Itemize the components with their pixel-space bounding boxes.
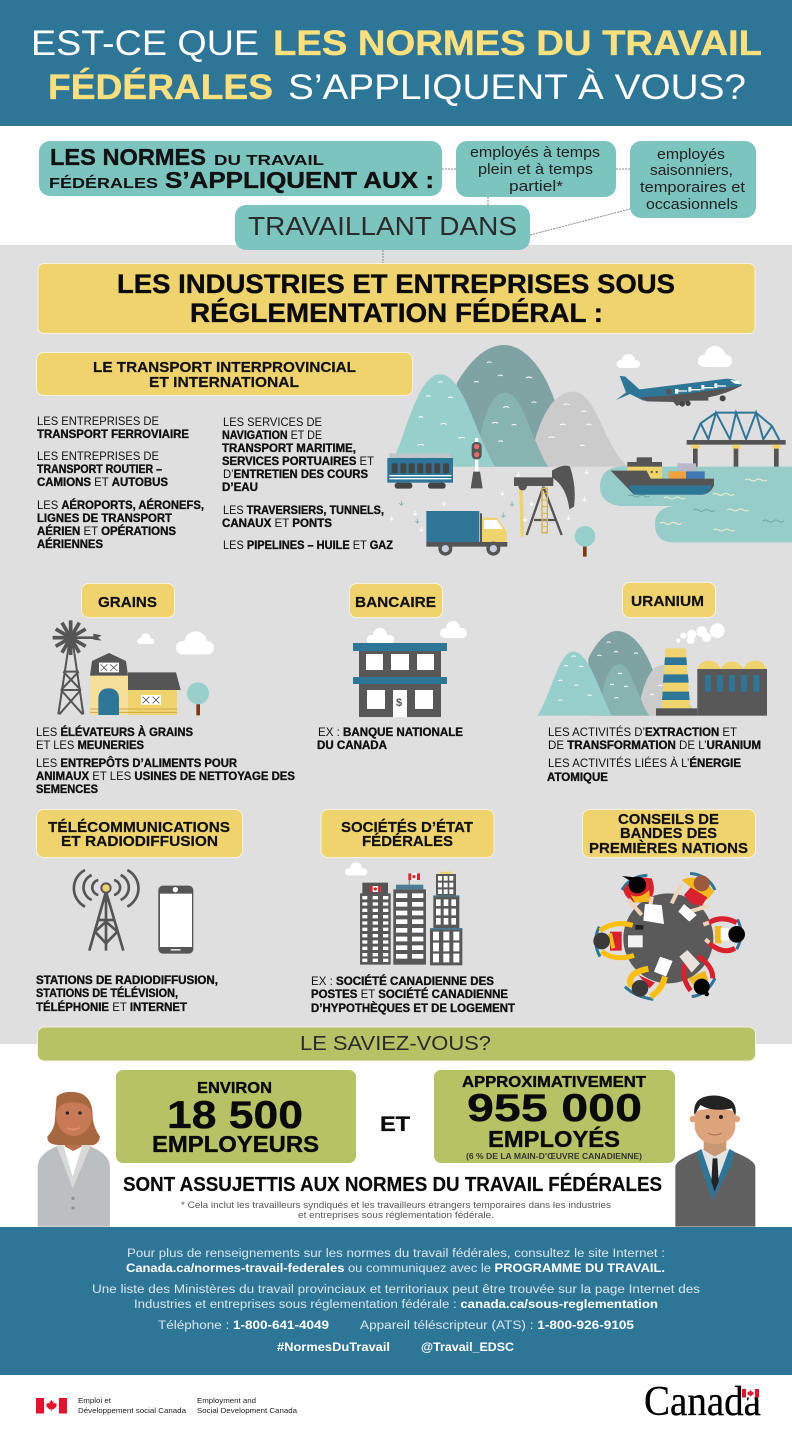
heading: bancaire: BANCAIRE xyxy=(355,594,436,611)
label: et: ET xyxy=(380,1113,410,1136)
box: employés à temps plein: partiel* xyxy=(509,179,563,195)
illustration: bank building: $ xyxy=(396,697,402,709)
person bottom left xyxy=(638,975,655,988)
heading: conseils de bandes: BANDES DES xyxy=(620,825,717,842)
footer contact panel: Industries et entreprises sous réglementation fédérale : canada.ca/sous-reglementation xyxy=(134,1299,658,1311)
grains text: ET LES MEUNERIES xyxy=(36,740,144,752)
illustration: transport landscape xyxy=(387,345,792,557)
footnote: et entreprises sous réglementation fédérale. xyxy=(298,1210,494,1221)
stat: employeurs xyxy=(116,1070,356,1163)
stat: employeurs: 18 500 xyxy=(167,1094,303,1137)
statement: SONT ASSUJETTIS AUX NORMES DU TRAVAIL FÉDÉRALES xyxy=(123,1173,662,1196)
heading: conseils de bandes: CONSEILS DE xyxy=(618,811,719,828)
tree xyxy=(583,546,587,557)
heading: télécommunications xyxy=(36,810,242,858)
transport text column 2: LES TRAVERSIERS, TUNNELS, xyxy=(223,505,384,517)
transport text column 1: CAMIONS ET AUTOBUS xyxy=(37,477,168,489)
heading: les industries: LES INDUSTRIES ET ENTREPRISES SOUS xyxy=(117,269,675,299)
box: les normes s'appliquent aux: DU TRAVAIL xyxy=(214,152,324,169)
clouds xyxy=(617,346,732,368)
box: employés saisonniers: occasionnels xyxy=(646,197,738,213)
footnote: * Cela inclut les travailleurs syndiqués et les travailleurs étrangers temporaires dans les industries xyxy=(181,1200,611,1211)
transport text column 2 xyxy=(222,417,393,552)
box: employés saisonniers: temporaires et xyxy=(640,180,745,196)
uranium text: LES ACTIVITÉS D’EXTRACTION ET xyxy=(548,726,737,739)
uranium text: ATOMIQUE xyxy=(547,772,608,784)
transport text column 2: TRANSPORT MARITIME, xyxy=(222,443,356,455)
box: employés saisonniers xyxy=(630,141,756,218)
stat: employés: APPROXIMATIVEMENT xyxy=(462,1074,647,1091)
heading: télécommunications: TÉLÉCOMMUNICATIONS xyxy=(48,819,230,836)
uranium text: DE TRANSFORMATION DE L’URANIUM xyxy=(548,740,761,752)
illustration: farm with windmill xyxy=(53,620,214,715)
small arrows xyxy=(390,469,589,531)
heading: sociétés d'état xyxy=(321,810,494,858)
telecom text xyxy=(36,975,218,1014)
grains text: ANIMAUX ET LES USINES DE NETTOYAGE DES xyxy=(36,771,295,783)
person bottom right xyxy=(688,971,708,988)
illustration: woman xyxy=(38,1092,110,1227)
transport text column 1: AÉRIENNES xyxy=(37,538,103,551)
stat: employés: EMPLOYÉS xyxy=(488,1125,620,1152)
ship xyxy=(677,463,696,471)
transport text column 2: D’ENTRETIEN DES COURS xyxy=(223,469,368,481)
illustration: antenna and phone xyxy=(74,870,193,954)
box: travaillant dans: TRAVAILLANT DANS xyxy=(248,211,517,241)
transport text column 1: TRANSPORT ROUTIER – xyxy=(37,464,163,476)
truck xyxy=(426,511,479,542)
signature: Canadian flag and department name: Développement social Canada xyxy=(78,1406,187,1415)
footnote xyxy=(181,1200,611,1221)
footer contact panel: Pour plus de renseignements sur les normes du travail fédérales, consultez le site Internet : xyxy=(127,1248,665,1260)
footer contact panel: Appareil téléscripteur (ATS) : 1-800-926-9105 xyxy=(360,1320,635,1332)
heading: uranium: URANIUM xyxy=(631,593,704,610)
heading: sociétés d'état: FÉDÉRALES xyxy=(362,833,453,850)
header banner: LES NORMES DU TRAVAIL xyxy=(273,24,762,63)
signature: Canadian flag and department name xyxy=(36,1396,298,1415)
footer contact panel: Une liste des Ministères du travail provinciaux et territoriaux peut être trouvée sur la page Internet des xyxy=(92,1284,700,1296)
person top left xyxy=(623,877,654,903)
box: les normes s'appliquent aux xyxy=(39,141,442,196)
telecom text: TÉLÉPHONIE ET INTERNET xyxy=(36,1001,187,1014)
sociétés text: D’HYPOTHÈQUES ET DE LOGEMENT xyxy=(311,1002,515,1015)
stat: employés: (6 % DE LA MAIN-D’ŒUVRE CANADIENNE) xyxy=(466,1152,642,1161)
signature: Canadian flag and department name: Employment and xyxy=(197,1396,256,1405)
transport text column 2: D’EAU xyxy=(222,482,258,494)
transport text column 1: TRANSPORT FERROVIAIRE xyxy=(37,429,189,441)
heading: télécommunications: ET RADIODIFFUSION xyxy=(61,833,218,850)
sociétés text: EX : SOCIÉTÉ CANADIENNE DES xyxy=(311,975,494,988)
transport text column 2: CANAUX ET PONTS xyxy=(222,518,332,530)
panel: transport heading: ET INTERNATIONAL xyxy=(149,374,299,391)
illustration: government buildings xyxy=(345,862,462,965)
footer contact panel xyxy=(0,1227,792,1375)
transport text column 2: NAVIGATION ET DE xyxy=(222,430,322,442)
box: employés saisonniers: employés xyxy=(657,147,725,163)
transport text column 1: LES AÉROPORTS, AÉRONEFS, xyxy=(37,499,204,512)
chairs xyxy=(596,873,741,999)
bridge xyxy=(693,413,779,440)
header banner: FÉDÉRALES xyxy=(48,67,273,107)
stat: employeurs: EMPLOYEURS xyxy=(152,1131,319,1157)
grains text xyxy=(36,726,295,796)
signature: Canadian flag and department name: Social Development Canada xyxy=(197,1406,298,1415)
barn xyxy=(90,675,128,715)
illustration: man xyxy=(675,1096,755,1227)
footer contact panel: @Travail_EDSC xyxy=(421,1342,514,1354)
panel: transport heading: LE TRANSPORT INTERPROVINCIAL xyxy=(93,359,356,376)
telecom text: STATIONS DE TÉLÉVISION, xyxy=(36,987,178,1000)
uranium text xyxy=(547,726,761,784)
water xyxy=(600,467,792,542)
person top right xyxy=(682,878,714,900)
box: les normes s'appliquent aux: FÉDÉRALES xyxy=(49,175,158,192)
heading: bancaire xyxy=(350,584,442,618)
footer contact panel: #NormesDuTravail xyxy=(277,1342,390,1354)
transport text column 2: LES PIPELINES – HUILE ET GAZ xyxy=(223,540,393,552)
illustration: bank building xyxy=(353,621,467,717)
grains text: LES ENTREPÔTS D’ALIMENTS POUR xyxy=(36,757,238,770)
person left xyxy=(610,932,622,951)
train carriage xyxy=(389,453,451,459)
stat: employeurs: ENVIRON xyxy=(197,1080,272,1097)
pumpjack xyxy=(514,477,553,486)
transport text column 1: LES ENTREPRISES DE xyxy=(37,416,159,428)
bancaire text xyxy=(317,727,463,752)
box: employés à temps plein: plein et à temps xyxy=(478,162,593,178)
banner: le saviez-vous xyxy=(38,1027,756,1061)
bancaire text: EX : BANQUE NATIONALE xyxy=(318,727,463,739)
sociétés text xyxy=(311,975,515,1015)
person right xyxy=(715,926,722,943)
connectors between boxes xyxy=(383,169,630,263)
heading: les industries xyxy=(38,264,755,334)
heading: conseils de bandes: PREMIÈRES NATIONS xyxy=(589,840,748,857)
grains text: LES ÉLÉVATEURS À GRAINS xyxy=(36,726,193,739)
clouds xyxy=(137,631,214,654)
telecom text: STATIONS DE RADIODIFFUSION, xyxy=(36,975,218,987)
stat: employés xyxy=(434,1070,675,1163)
transport text column 2: SERVICES PORTUAIRES ET xyxy=(222,456,374,468)
box: employés saisonniers: saisonniers, xyxy=(650,163,733,179)
banner: le saviez-vous: LE SAVIEZ-VOUS? xyxy=(300,1033,491,1055)
sociétés text: POSTES ET SOCIÉTÉ CANADIENNE xyxy=(311,988,508,1001)
windmill xyxy=(58,642,83,714)
illustration: council table xyxy=(593,873,745,999)
signature: Canadian flag and department name: Emploi et xyxy=(78,1396,112,1405)
header banner: EST-CE QUE xyxy=(31,24,259,63)
footer contact panel: Téléphone : 1-800-641-4049 xyxy=(158,1320,329,1332)
transport text column 2: LES SERVICES DE xyxy=(223,417,322,429)
footer contact panel: Canada.ca/normes-travail-federales ou communiquez avec le PROGRAMME DU TRAVAIL. xyxy=(126,1263,665,1275)
transport text column 1: LES ENTREPRISES DE xyxy=(37,451,159,463)
header banner xyxy=(0,0,792,126)
box: les normes s'appliquent aux: S’APPLIQUENT AUX : xyxy=(165,167,434,193)
transport text column 1 xyxy=(37,416,204,551)
box: les normes s'appliquent aux: LES NORMES xyxy=(50,144,206,170)
uranium text: LES ACTIVITÉS LIÉES À L’ÉNERGIE xyxy=(548,757,741,770)
header banner: S’APPLIQUENT À VOUS? xyxy=(288,68,746,107)
grains text: SEMENCES xyxy=(36,784,98,796)
signal xyxy=(475,438,478,475)
heading: les industries: RÉGLEMENTATION FÉDÉRAL : xyxy=(190,297,603,328)
box: employés à temps plein xyxy=(456,141,616,197)
heading: grains xyxy=(82,584,174,618)
Canada wordmark: Canada xyxy=(644,1379,761,1425)
stat: employés: 955 000 xyxy=(467,1087,642,1130)
transport text column 1: LIGNES DE TRANSPORT xyxy=(37,513,172,525)
panel: transport heading xyxy=(36,352,412,396)
box: employés à temps plein: employés à temps xyxy=(470,145,600,161)
tree xyxy=(196,704,200,715)
heading: sociétés d'état: SOCIÉTÉS D’ÉTAT xyxy=(341,819,473,836)
airplane xyxy=(616,376,742,402)
bancaire text: DU CANADA xyxy=(317,740,387,752)
heading: uranium xyxy=(622,582,716,618)
heading: grains: GRAINS xyxy=(98,594,157,611)
papers xyxy=(643,904,664,924)
heading: conseils de bandes xyxy=(582,810,756,858)
box: travaillant dans xyxy=(235,205,530,250)
transport text column 1: AÉRIEN ET OPÉRATIONS xyxy=(37,525,176,538)
illustration: uranium plant xyxy=(537,623,767,716)
